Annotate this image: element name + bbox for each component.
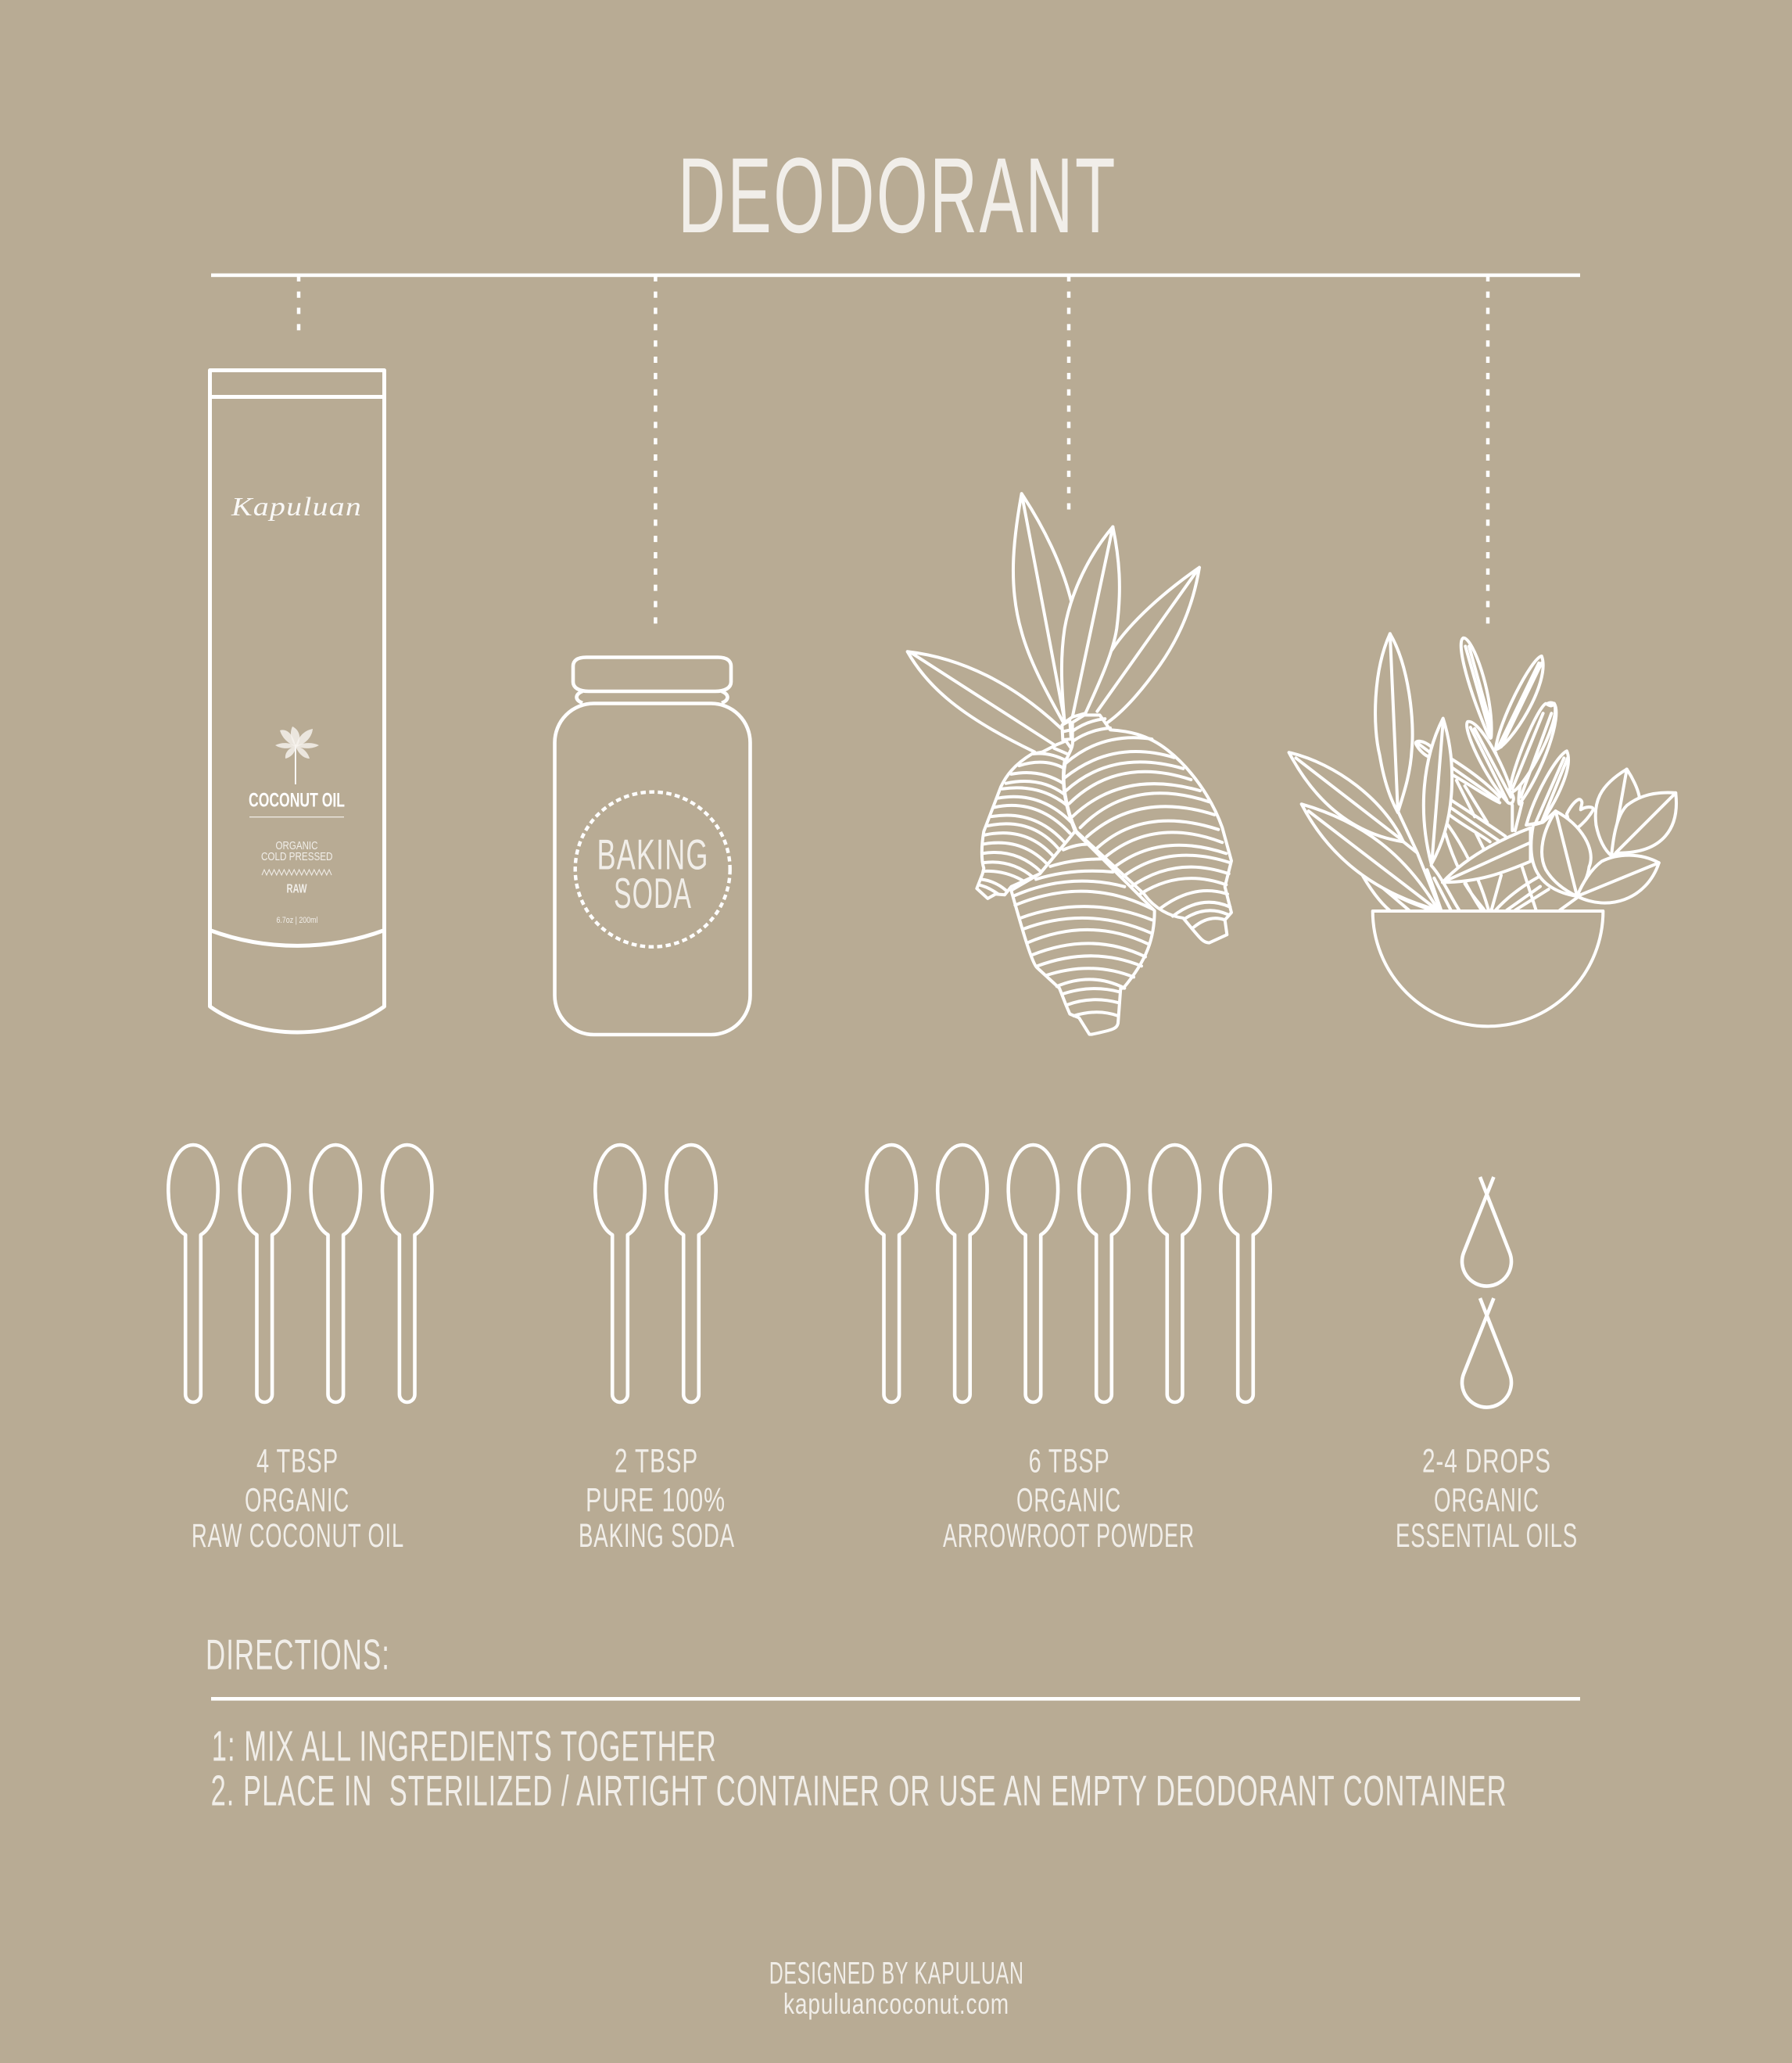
label: arrowroot powder [943, 1444, 1195, 1555]
front round leaves [1443, 770, 1676, 903]
illustration: baking soda jar [555, 657, 751, 1035]
icon: palm tree [275, 727, 319, 784]
directions heading: DIRECTIONS: [206, 1630, 390, 1678]
spoons: 6 tbsp [867, 1145, 1271, 1402]
back stems and leaves [1360, 638, 1593, 910]
label: baking soda: PURE 100% [586, 1483, 726, 1519]
product descriptors: 6.7oz | 200ml [277, 916, 317, 925]
spoons: 4 tbsp [168, 1145, 432, 1402]
illustration: baking soda jar: BAKING [597, 831, 708, 879]
product descriptors: ORGANIC [275, 840, 317, 852]
label: baking soda [579, 1444, 735, 1555]
root tuber: right [1064, 715, 1231, 943]
footer credit [769, 1957, 1024, 2020]
product descriptors [261, 840, 333, 925]
root tuber: left [977, 741, 1075, 899]
label: essential oils: 2-4 DROPS [1422, 1444, 1551, 1480]
illustration: coconut oil tube [210, 371, 385, 1032]
label: baking soda: BAKING SODA [579, 1518, 735, 1555]
product descriptors: RAW [286, 883, 307, 896]
bowl [1373, 911, 1603, 1026]
label: coconut oil [192, 1444, 404, 1555]
drops [1462, 1177, 1511, 1408]
illustration: arrowroot [908, 493, 1231, 1035]
illustration: baking soda jar: SODA [614, 869, 692, 917]
root tuber: bottom [1011, 831, 1155, 1035]
spoons: 2 tbsp [595, 1145, 716, 1402]
title: DEODORANT [678, 136, 1117, 256]
directions steps [211, 1722, 1507, 1815]
directions steps: 1: MIX ALL INGREDIENTS TOGETHER [212, 1722, 717, 1771]
footer credit: kapuluancoconut.com [783, 1988, 1009, 2020]
top divider with dashed drop lines [211, 274, 1580, 624]
label: essential oils [1396, 1444, 1578, 1555]
illustration: herbs in bowl [1289, 633, 1676, 1026]
label: arrowroot powder: ARROWROOT POWDER [943, 1518, 1195, 1555]
product name: COCONUT OIL [249, 790, 345, 812]
directions divider [211, 1697, 1580, 1701]
jar label [575, 792, 730, 947]
label: essential oils: ORGANIC [1434, 1483, 1539, 1519]
label: arrowroot powder: ORGANIC [1016, 1483, 1121, 1519]
label: arrowroot powder: 6 TBSP [1029, 1444, 1110, 1480]
footer credit: DESIGNED BY KAPULUAN [769, 1957, 1024, 1991]
label: coconut oil: ORGANIC [245, 1483, 349, 1519]
label: coconut oil: RAW COCONUT OIL [192, 1518, 404, 1555]
brand script: Kapuluan [231, 493, 362, 522]
tall and left leaves [1289, 633, 1452, 910]
label: baking soda: 2 TBSP [615, 1444, 698, 1480]
label: essential oils: ESSENTIAL OILS [1396, 1518, 1578, 1555]
label: coconut oil: 4 TBSP [256, 1444, 339, 1480]
product descriptors: COLD PRESSED [261, 851, 333, 863]
leaves [908, 493, 1199, 752]
